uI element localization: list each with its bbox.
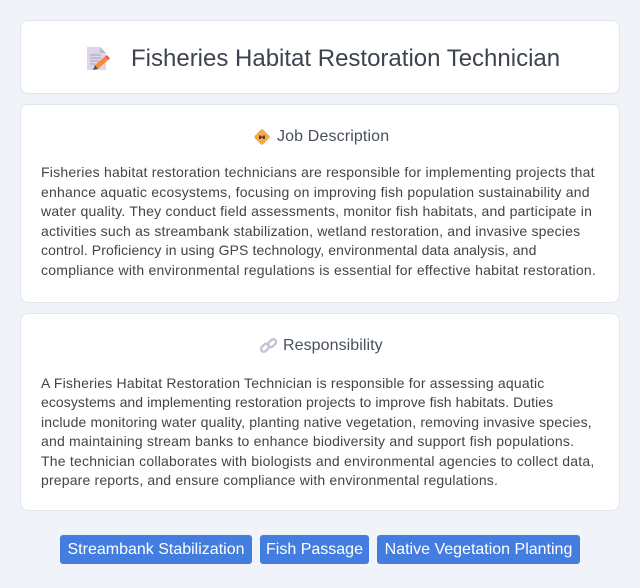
text block: job description: water quality. They conduct field assessments, monitor fish habitats, and participate in	[41, 203, 592, 219]
text block: responsibility: ecosystems and implementing restoration projects to improve fish habitats. Duties	[41, 394, 553, 410]
text block: responsibility: The technician collaborates with biologists and environmental agencies to collect data,	[41, 453, 594, 469]
tag: streambank stabilization	[60, 535, 252, 564]
text block: job description: compliance with environmental regulations is essential for effective habitat restoration.	[41, 262, 596, 278]
text block: job description: activities such as streambank stabilization, wetland restoration, and invasive species	[41, 223, 580, 239]
icon: document with pencil	[87, 47, 110, 70]
tag: native vegetation planting	[377, 535, 580, 564]
title: Fisheries Habitat Restoration Technician	[131, 45, 560, 72]
panel: title card	[20, 20, 620, 94]
text block: responsibility: A Fisheries Habitat Restoration Technician is responsible for assessing aquatic	[41, 375, 544, 391]
heading: responsibility: Responsibility	[283, 337, 383, 354]
panel: job description	[20, 104, 620, 303]
text block: responsibility: and maintaining stream banks to enhance biodiversity and support fish populations.	[41, 433, 574, 449]
heading: job description: Job Description	[277, 128, 389, 145]
text block: job description: control. Proficiency in using GPS technology, environmental data analysis, and	[41, 242, 536, 258]
text block: job description: enhance aquatic ecosystems, focusing on improving fish population sustainability and	[41, 184, 590, 200]
tag: native vegetation planting: Native Vegetation Planting	[385, 541, 572, 558]
icon: chain link	[260, 338, 277, 353]
text block: job description: Fisheries habitat restoration technicians are responsible for implementing projects that	[41, 164, 595, 180]
panel: responsibility	[20, 313, 620, 511]
tag: fish passage	[260, 535, 369, 564]
text block: responsibility	[41, 375, 594, 488]
text block: job description	[41, 164, 596, 278]
tag: streambank stabilization: Streambank Stabilization	[68, 541, 244, 558]
tag: fish passage: Fish Passage	[266, 541, 363, 558]
text block: responsibility: include monitoring water quality, planting native vegetation, removing invasive species,	[41, 414, 592, 430]
text block: responsibility: prepare reports, and ensure compliance with environmental regulations.	[41, 472, 498, 488]
icon: diamond sign	[254, 129, 270, 145]
